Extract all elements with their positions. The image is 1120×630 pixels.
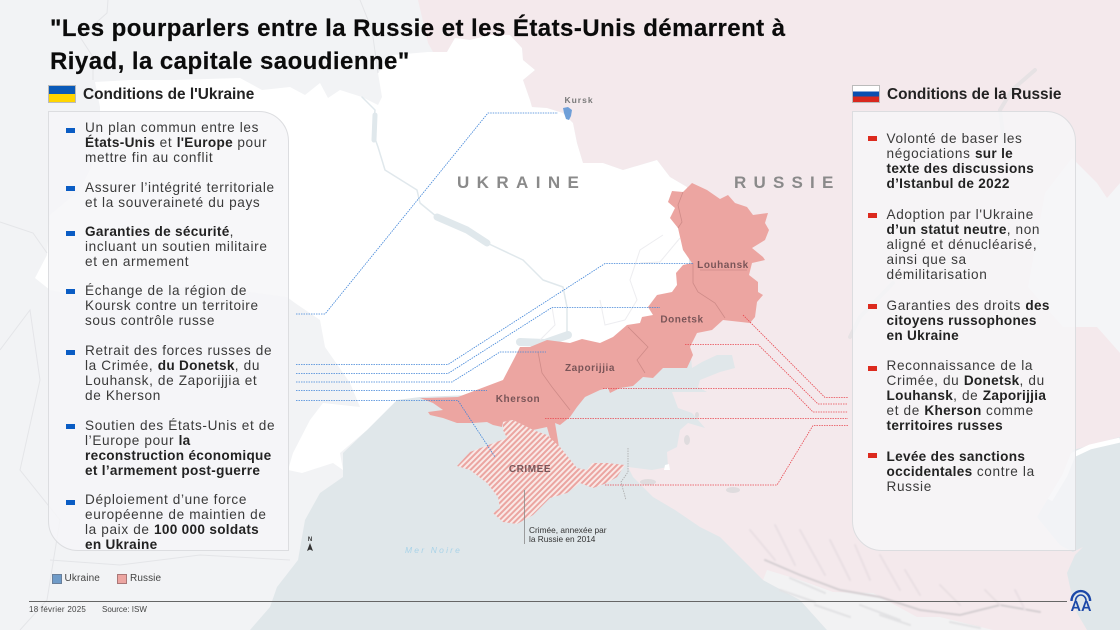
bullet [868,366,877,370]
AA logo [1070,591,1092,615]
map labels: CRIMEE [509,464,551,475]
Crimea callout text [529,525,606,544]
item 1: Volonté de baser les [886,130,1022,146]
item 1 [886,130,1034,190]
Kerch strait boundary [621,448,628,500]
item 6: l’Europe pour la [85,432,191,448]
item 7 [85,492,267,552]
item 1: négociations sur le [886,146,1013,160]
item 4: Louhansk, de Zaporijjia [886,388,1046,403]
Crimea callout text: la Russie en 2014 [529,534,595,544]
north arrow: N [308,537,312,543]
map labels: Louhansk [697,260,749,271]
bullet [66,289,75,294]
red connector lines [545,315,848,485]
legend swatch: Ukraine [52,574,62,584]
item 3 [886,298,1050,342]
bullet [66,500,75,504]
source: Source: ISW [102,605,147,614]
item 3 [85,224,268,268]
panel: conditions Russie [852,110,1076,550]
flag: Ukraine [48,85,76,103]
bullet [66,186,75,190]
item 3: incluant un soutien militaire [85,238,268,254]
item 3: et en armement [85,254,189,268]
item 6: et l’armement post-guerre [85,462,260,478]
item 7: européenne de maintien de [85,506,267,522]
item 3: Garanties des droits des [886,298,1050,312]
item 3: en Ukraine [886,328,959,342]
list: conditions Russie [868,130,1050,494]
title [50,14,786,75]
bullet [66,128,75,132]
Crimea callout text: Crimée, annexée par [529,525,606,535]
heading: conditions Ukraine: Conditions de l'Ukraine [83,86,254,103]
item 5 [85,342,272,402]
item 1 [85,120,267,165]
map labels: Zaporijjia [565,363,615,374]
map labels: Kherson [496,394,540,405]
item 7: la paix de 100 000 soldats [85,522,259,536]
item 5: de Kherson [85,388,161,402]
map labels [405,95,840,555]
legend label: Ukraine: Ukraine [64,573,100,584]
date: 18 février 2025 [29,605,86,614]
item 2: aligné et dénucléarisé, [886,236,1037,252]
title: Riyad, la capitale saoudienne" [50,48,410,75]
item 5: Louhansk, de Zaporijjia et [85,372,257,388]
Kursk region [563,107,572,120]
item 5: Retrait des forces russes de [85,342,272,358]
north arrow [307,537,313,551]
Caucasus relief [750,525,1040,628]
item 3: Garanties de sécurité, [85,224,234,238]
bullet [868,304,877,308]
item 5: Russie [886,478,932,494]
bullet [868,452,877,458]
item 2 [886,206,1040,282]
Crimea callout line [524,490,526,544]
bullet [66,230,75,236]
item 2 [85,180,275,210]
item 5: la Crimée, du Donetsk, du [85,358,260,372]
item 4: sous contrôle russe [85,312,215,328]
item 6 [85,418,275,478]
item 2: démilitarisation [886,266,987,282]
legend label: Russie: Russie [130,573,161,584]
title: "Les pourparlers entre la Russie et les États-Unis démarrent à [50,15,786,42]
bullet [868,212,877,218]
bullet [66,424,75,428]
blue connector lines [296,113,693,457]
map labels: UKRAINE [457,173,586,192]
item 1: États-Unis et l'Europe pour [85,135,267,150]
item 1: Un plan commun entre les [85,120,259,135]
item 4: Échange de la région de [85,282,247,298]
item 4: et de Kherson comme [886,403,1034,418]
occupied regions [420,183,769,447]
item 2: ainsi que sa [886,252,967,266]
footer rule [29,600,1067,602]
item 3: citoyens russophones [886,312,1037,328]
item 2: Assurer l’intégrité territoriale [85,180,275,194]
item 5 [886,448,1035,494]
item 5: Levée des sanctions [886,448,1025,464]
item 4: Reconnaissance de la [886,358,1033,373]
item 2: et la souveraineté du pays [85,194,260,210]
item 2: Adoption par l'Ukraine [886,206,1034,222]
item 1: texte des discussions [886,160,1034,176]
map labels: RUSSIE [734,173,840,192]
heading: conditions Russie: Conditions de la Russie [887,86,1061,103]
item 4 [886,358,1046,433]
item 4: Koursk contre un territoire [85,298,259,312]
item 7: Déploiement d’une force [85,492,247,506]
map labels: Kursk [564,95,594,105]
map labels: Donetsk [660,314,704,326]
item 6: Soutien des États-Unis et de [85,418,275,432]
bullet [66,350,75,354]
item 4: territoires russes [886,418,1003,433]
item 1: d’Istanbul de 2022 [886,176,1010,190]
panel: conditions Ukraine [48,110,288,550]
Crimea [457,420,625,524]
list: conditions Ukraine [66,120,275,552]
AA logo: AA [1070,598,1092,615]
item 5: occidentales contre la [886,464,1035,478]
item 4: Crimée, du Donetsk, du [886,373,1045,388]
item 6: reconstruction économique [85,448,272,462]
bullet [868,136,877,140]
legend [52,573,161,584]
item 2: d’un statut neutre, non [886,222,1040,236]
item 7: en Ukraine [85,536,158,552]
map labels: Mer Noire [405,545,462,555]
legend swatch: Russie [117,574,127,584]
item 1: mettre fin au conflit [85,150,213,165]
flag: Russie [852,85,880,103]
item 4 [85,282,259,328]
